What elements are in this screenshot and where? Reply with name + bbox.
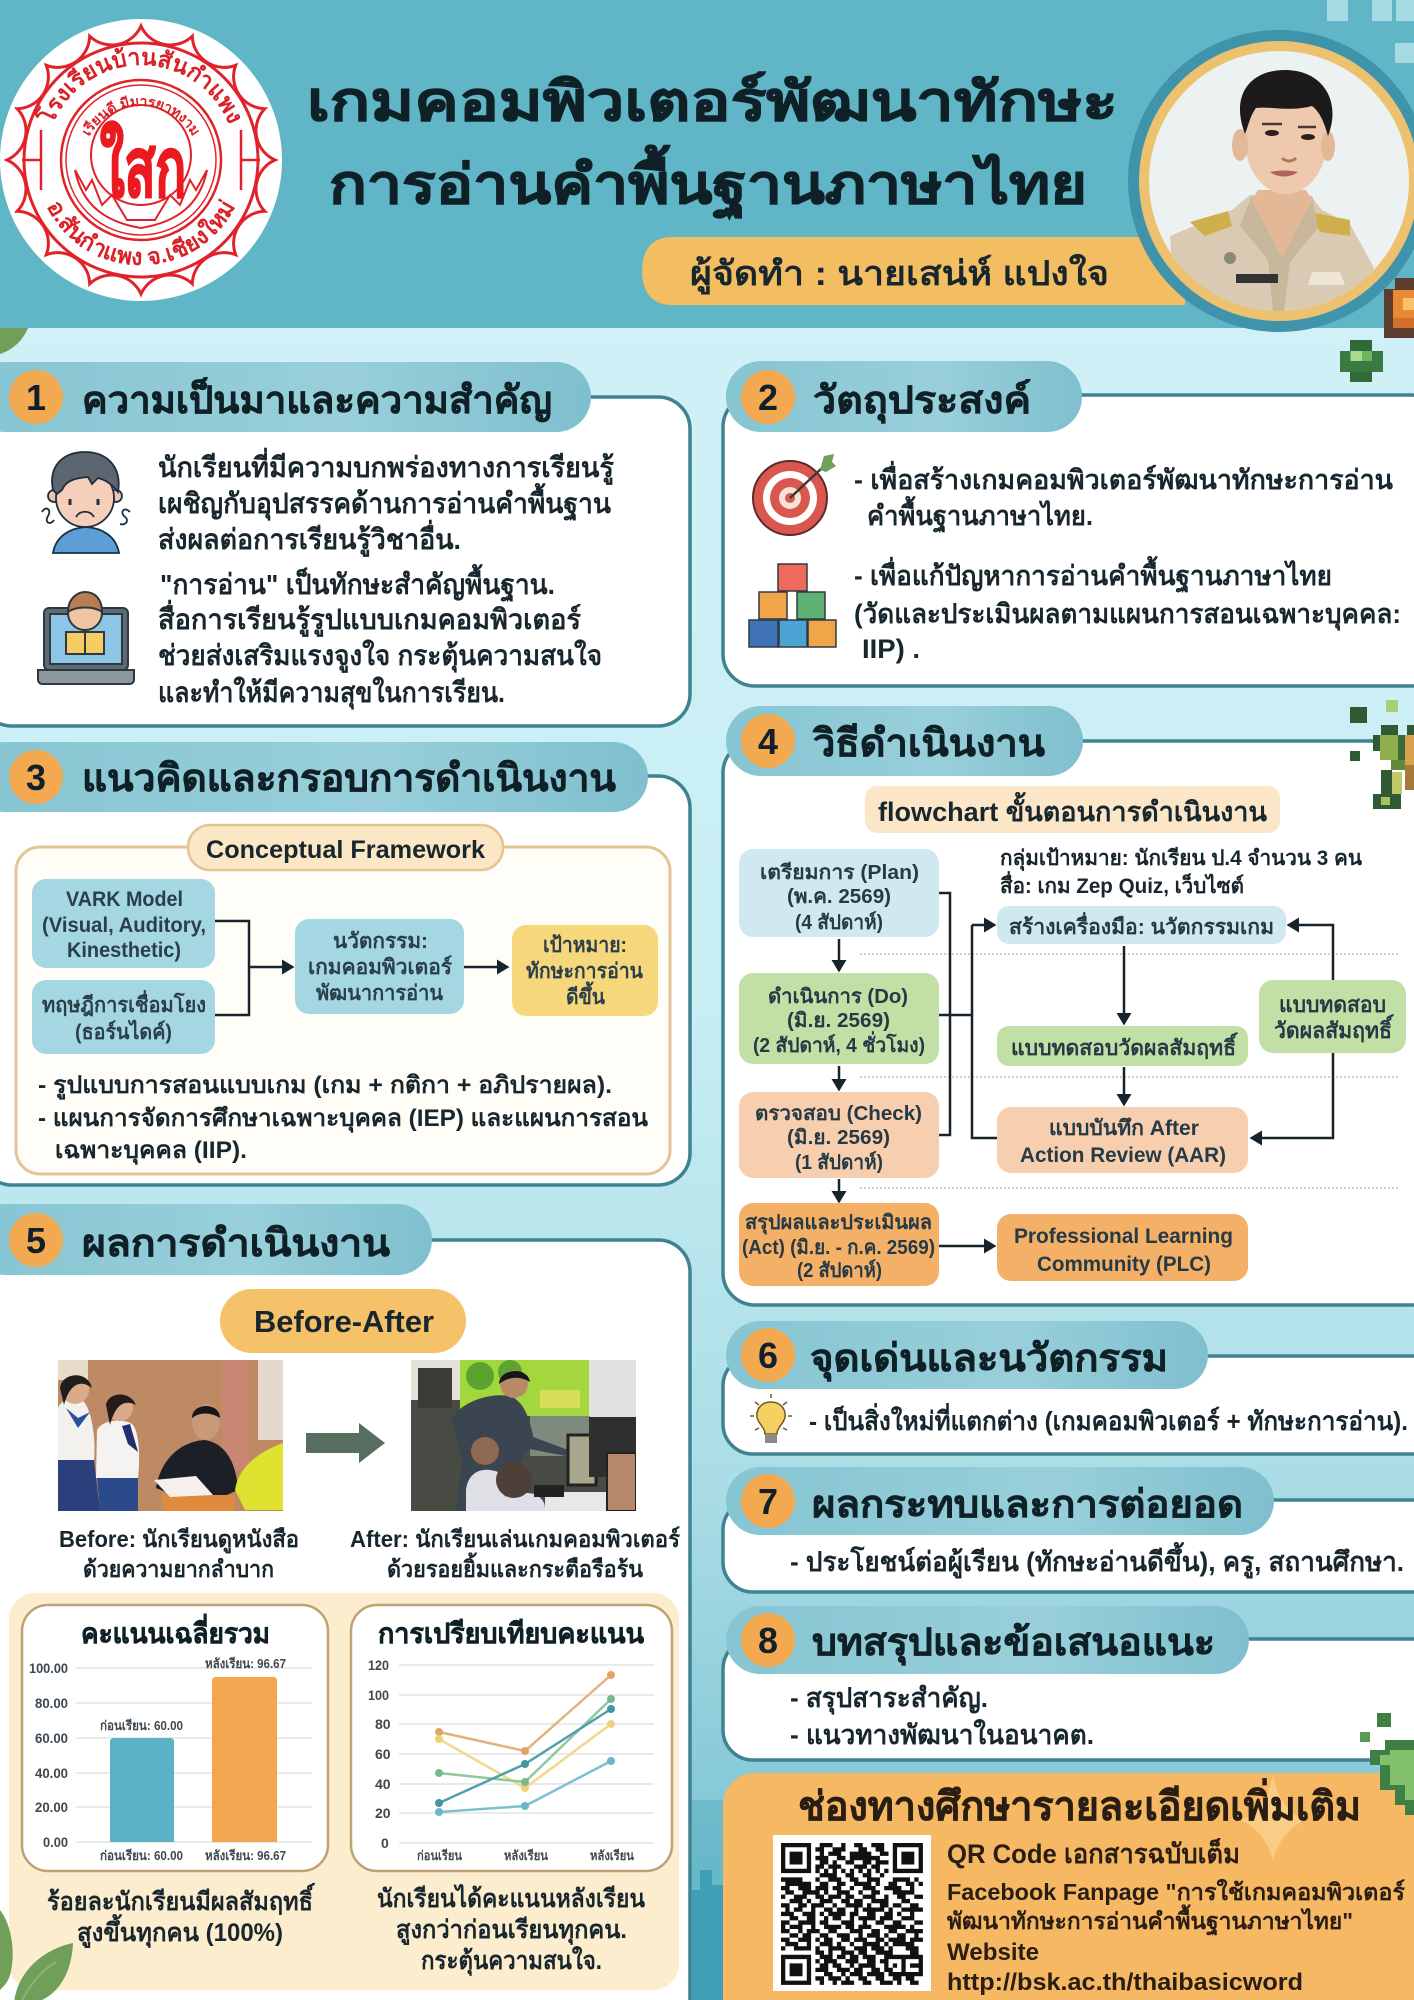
heading pill: 8 (758, 1620, 778, 1661)
heading pill: ผลการดำเนินงาน (82, 1223, 390, 1265)
bar chart card: 80.00 (35, 1695, 68, 1711)
series points (435, 1671, 615, 1816)
tan band (9, 1593, 679, 1990)
author pill (642, 237, 1185, 305)
header band (0, 0, 1414, 328)
portrait (1128, 30, 1414, 332)
box: achievement test: แบบทดสอบวัดผลสัมฤทธิ์ (1011, 1032, 1238, 1060)
box: side test (1259, 980, 1406, 1053)
bar chart card: หลังเรียน: 96.67 (205, 1656, 286, 1671)
panel text: - ประโยชน์ต่อผู้เรียน (ทักษะอ่านดีขึ้น), ครู, สถานศึกษา. (790, 1541, 1404, 1579)
panel text: "การอ่าน" เป็นทักษะสำคัญพื้นฐาน. (160, 563, 555, 603)
flowchart label: flowchart ขั้นตอนการดำเนินงาน (878, 791, 1268, 827)
panel text: - สรุปสาระสำคัญ. (790, 1683, 988, 1715)
panel text: IIP) . (862, 634, 920, 664)
contact text: http://bsk.ac.th/thaibasicword (947, 1969, 1303, 1996)
box: achievement test (997, 1026, 1248, 1066)
framework bullets: - แผนการจัดการศึกษาเฉพาะบุคคล (IEP) และแผนการสอน (38, 1105, 649, 1134)
bar chart card: 100.00 (29, 1660, 68, 1676)
VARK box: Kinesthetic) (67, 939, 181, 962)
goal box (512, 925, 658, 1016)
school logo (0, 19, 282, 301)
photo: before (58, 1360, 283, 1511)
school logo: เรียนดี มีมารยาทงาม (82, 95, 199, 136)
arrow: innovation to goal (464, 966, 507, 968)
panel text (158, 447, 614, 710)
line chart card: 40 (375, 1776, 391, 1792)
heading pill (0, 1204, 432, 1275)
captions: ด้วยความยากลำบาก (83, 1556, 274, 1582)
panel text (790, 1683, 1094, 1750)
panel text: คำพื้นฐานภาษาไทย. (867, 495, 1093, 534)
box: create tool: สร้างเครื่องมือ: นวัตกรรมเกม (1009, 911, 1274, 939)
arrow: do to check (838, 1066, 840, 1089)
title (307, 71, 1118, 220)
heading pill: 7 (758, 1481, 778, 1522)
panel text: ส่งผลต่อการเรียนรู้วิชาอื่น. (158, 519, 461, 557)
goal box: ดีขึ้น (566, 981, 606, 1009)
school logo: อ.สันกำแพง จ.เชียงใหม่ (47, 198, 235, 266)
arrow: check to act (838, 1179, 840, 1201)
heading pill: บทสรุปและข้อเสนอแนะ (812, 1622, 1215, 1666)
panel box (0, 776, 690, 1185)
box: side test: วัดผลสัมฤทธิ์ (1274, 1014, 1394, 1043)
heading pill: วัตถุประสงค์ (813, 379, 1031, 424)
series lines (439, 1675, 611, 1812)
arrow: create to test (1123, 946, 1125, 1023)
title: การอ่านคำพื้นฐานภาษาไทย (329, 145, 1087, 220)
step: plan: เตรียมการ (Plan) (760, 861, 919, 884)
author pill: ผู้จัดทำ : นายเสน่ห์ แปงใจ (690, 253, 1109, 295)
box: AAR (997, 1107, 1248, 1173)
panel text: (วัดและประเมินผลตามแผนการสอนเฉพาะบุคคล: (854, 599, 1401, 631)
arrow: act to PLC (939, 1245, 994, 1247)
panel text: และทำให้มีความสุขในการเรียน. (158, 676, 505, 710)
heading pill: 1 (26, 377, 46, 418)
arrows: inputs to innovation (215, 921, 292, 1015)
contact text: Facebook Fanpage "การใช้เกมคอมพิวเตอร์ (947, 1878, 1406, 1905)
line chart card: 80 (375, 1716, 391, 1732)
step: do: ดำเนินการ (Do) (768, 986, 908, 1008)
heading pill: 6 (758, 1335, 778, 1376)
step: check (739, 1092, 939, 1178)
title: เกมคอมพิวเตอร์พัฒนาทักษะ (307, 71, 1118, 132)
heading pill (726, 1606, 1249, 1674)
icon: leaf top left (0, 328, 28, 354)
before-after pill: Before-After (254, 1304, 434, 1339)
captions: ด้วยรอยยิ้มและกระตือรือร้น (387, 1552, 643, 1582)
step: act (739, 1203, 939, 1286)
panel box (723, 1500, 1414, 1592)
heading pill (0, 742, 648, 812)
icon: stacked boxes (749, 564, 836, 647)
step: plan (739, 849, 939, 937)
framework label (188, 825, 503, 870)
panel box (723, 1356, 1414, 1454)
heading pill: จุดเด่นและนวัตกรรม (810, 1338, 1168, 1382)
target group text: กลุ่มเป้าหมาย: นักเรียน ป.4 จำนวน 3 คน (1000, 846, 1363, 872)
contact panel (723, 1773, 1414, 2000)
step: check: (1 สัปดาห์) (795, 1151, 883, 1174)
framework bullets: - รูปแบบการสอนแบบเกม (เกม + กติกา + อภิปรายผล). (38, 1072, 612, 1100)
bar chart card: ก่อนเรียน: 60.00 (100, 1718, 183, 1733)
before-after pill (220, 1289, 466, 1353)
bar chart card: 20.00 (35, 1799, 68, 1815)
box: PLC: Community (PLC) (1037, 1253, 1211, 1276)
box: PLC (997, 1214, 1248, 1281)
innovation box (295, 919, 464, 1014)
heading pill: 3 (26, 757, 46, 798)
bars (110, 1677, 277, 1842)
heading pill (0, 362, 591, 432)
contact text: พัฒนาทักษะการอ่านคำพื้นฐานภาษาไทย" (947, 1904, 1353, 1936)
chart notes: สูงกว่าก่อนเรียนทุกคน. (396, 1916, 627, 1946)
line chart card: การเปรียบเทียบคะแนน (378, 1618, 644, 1649)
panel 2: objectives (723, 361, 1414, 686)
heading pill: วิธีดำเนินงาน (812, 723, 1045, 765)
step: act: (2 สัปดาห์) (797, 1259, 882, 1282)
framework outline (16, 847, 670, 1174)
panel text (854, 460, 1401, 664)
icon: target (753, 454, 836, 535)
chart notes: ร้อยละนักเรียนมีผลสัมฤทธิ์ (47, 1882, 315, 1916)
panel 5: results (0, 1204, 690, 2000)
panel text: - เพื่อสร้างเกมคอมพิวเตอร์พัฒนาทักษะการอ่าน (854, 460, 1394, 495)
goal box: เป้าหมาย: (543, 933, 627, 957)
heading pill: 5 (26, 1220, 46, 1261)
photo: after (411, 1360, 636, 1511)
contact text (947, 1836, 1406, 1996)
VARK box: VARK Model (66, 888, 183, 911)
theory box (32, 980, 215, 1054)
box: create tool (997, 906, 1286, 944)
framework bullets (38, 1072, 649, 1166)
panel 1: background (0, 362, 690, 726)
panel text: เผชิญกับอุปสรรคด้านการอ่านคำพื้นฐาน (158, 482, 611, 522)
step: do (739, 973, 939, 1064)
innovation box: พัฒนาการอ่าน (316, 982, 444, 1005)
chart notes: สูงขึ้นทุกคน (100%) (77, 1913, 283, 1949)
teal corner decoration (692, 1800, 723, 2000)
step: do: (2 สัปดาห์, 4 ชั่วโมง) (753, 1030, 925, 1057)
arrow: test to AAR (1123, 1067, 1125, 1104)
contact text: QR Code เอกสารฉบับเต็ม (947, 1836, 1240, 1869)
sparkle (1241, 1775, 1305, 1860)
step: act: สรุปผลและประเมินผล (745, 1212, 932, 1235)
pixel decoration: leaf (1350, 700, 1414, 809)
captions: Before: นักเรียนดูหนังสือ (59, 1526, 299, 1554)
icon: laptop reader (38, 592, 134, 684)
captions (59, 1526, 681, 1582)
bar chart card: ก่อนเรียน: 60.00 (100, 1848, 183, 1863)
line chart card: 100 (368, 1687, 389, 1703)
captions: After: นักเรียนเล่นเกมคอมพิวเตอร์ (350, 1526, 681, 1552)
bar chart card: 0.00 (43, 1834, 68, 1850)
innovation box: เกมคอมพิวเตอร์ (308, 955, 453, 979)
line chart card: 20 (375, 1805, 391, 1821)
skyline decoration (692, 1870, 723, 2000)
QR code (773, 1835, 931, 1991)
VARK box (32, 879, 215, 968)
panel text: - เพื่อแก้ปัญหาการอ่านคำพื้นฐานภาษาไทย (854, 555, 1332, 594)
step: check: (มิ.ย. 2569) (787, 1127, 890, 1149)
heading pill (726, 361, 1082, 432)
panel 7: impact (723, 1467, 1414, 1592)
bar chart card: 60.00 (35, 1730, 68, 1746)
chart notes (47, 1882, 645, 1977)
panel text: ช่วยส่งเสริมแรงจูงใจ กระตุ้นความสนใจ (158, 639, 602, 673)
panel box (0, 1240, 690, 2000)
step: plan: (4 สัปดาห์) (795, 911, 883, 934)
VARK box: (Visual, Auditory, (42, 914, 206, 937)
bar chart card (22, 1605, 328, 1871)
heading pill (726, 1467, 1274, 1535)
step: act: (Act) (มิ.ย. - ก.ค. 2569) (742, 1237, 935, 1259)
line chart card: หลังเรียน (590, 1848, 634, 1863)
heading pill (726, 706, 1083, 776)
arrow: before to after (306, 1423, 385, 1463)
pixel decoration: orange block (1384, 278, 1414, 338)
step: plan: (พ.ค. 2569) (787, 886, 891, 908)
arrow: plan to do (838, 939, 840, 970)
panel 8: conclusion (723, 1606, 1414, 1760)
box: AAR: แบบบันทึก After (1049, 1117, 1199, 1140)
goal box: ทักษะการอ่าน (526, 960, 644, 983)
line chart card: ก่อนเรียน (417, 1848, 462, 1863)
panel box (723, 741, 1414, 1305)
theory box: ทฤษฎีการเชื่อมโยง (42, 989, 206, 1017)
theory box: (ธอร์นไดค์) (75, 1019, 172, 1044)
dotted rows (860, 954, 1400, 1188)
target group text: สื่อ: เกม Zep Quiz, เว็บไซต์ (1000, 870, 1244, 898)
line chart card: หลังเรียน (504, 1848, 548, 1863)
pixel decoration: heart (1360, 1713, 1414, 1815)
connectors: bracket from PDCA (939, 893, 997, 1138)
panel text: - แนวทางพัฒนาในอนาคต. (790, 1719, 1094, 1750)
target group text (1000, 846, 1363, 898)
icon: worried student (42, 452, 130, 553)
step: do: (มิ.ย. 2569) (787, 1010, 890, 1032)
box: PLC: Professional Learning (1014, 1225, 1233, 1248)
framework bullets: เฉพาะบุคคล (IIP). (55, 1137, 247, 1166)
panel 4: method (723, 706, 1414, 1305)
pixel decoration: green gem (1340, 340, 1383, 382)
line chart card: 120 (368, 1657, 389, 1673)
arrow: side test to AAR (1252, 1053, 1333, 1138)
line chart card: 0 (381, 1835, 389, 1851)
line chart card (351, 1605, 672, 1871)
heading pill: ความเป็นมาและความสำคัญ (82, 377, 552, 422)
flowchart label (865, 786, 1280, 833)
panel 6: highlights (723, 1321, 1414, 1454)
heading pill: 2 (758, 377, 778, 418)
innovation box: นวัตกรรม: (333, 930, 428, 953)
bar chart card: หลังเรียน: 96.67 (205, 1848, 286, 1863)
contact text: Website (947, 1939, 1039, 1966)
line chart card: 60 (375, 1746, 391, 1762)
heading pill: ผลกระทบและการต่อยอด (812, 1484, 1243, 1526)
contact title: ช่องทางศึกษารายละเอียดเพิ่มเติม (798, 1778, 1361, 1829)
heading pill: แนวคิดและกรอบการดำเนินงาน (82, 758, 616, 800)
bar chart card: คะแนนเฉลี่ยรวม (81, 1613, 270, 1649)
school logo: โรงเรียนบ้านสันกำแพง (34, 46, 240, 124)
panel box (723, 395, 1414, 686)
chart notes: กระตุ้นความสนใจ. (421, 1945, 602, 1977)
chart notes: นักเรียนได้คะแนนหลังเรียน (377, 1883, 645, 1913)
panel text: สื่อการเรียนรู้รูปแบบเกมคอมพิวเตอร์ (158, 599, 581, 637)
panel 3: framework (0, 742, 690, 1185)
heading pill (726, 1321, 1208, 1389)
bar chart card: 40.00 (35, 1765, 68, 1781)
icon: light bulb (750, 1394, 792, 1443)
school logo: ใสก (100, 121, 186, 214)
framework label: Conceptual Framework (206, 836, 485, 864)
icon: leaves bottom left (0, 1910, 73, 2000)
panel box (0, 397, 690, 726)
step: check: ตรวจสอบ (Check) (755, 1103, 922, 1125)
box: side test: แบบทดสอบ (1279, 992, 1386, 1017)
panel text: นักเรียนที่มีความบกพร่องทางการเรียนรู้ (158, 447, 614, 485)
arrow: side test to create (1289, 925, 1333, 980)
arrow: to create tool (972, 924, 994, 926)
box: AAR: Action Review (AAR) (1020, 1144, 1226, 1167)
heading pill: 4 (758, 721, 778, 762)
panel box (723, 1639, 1414, 1760)
